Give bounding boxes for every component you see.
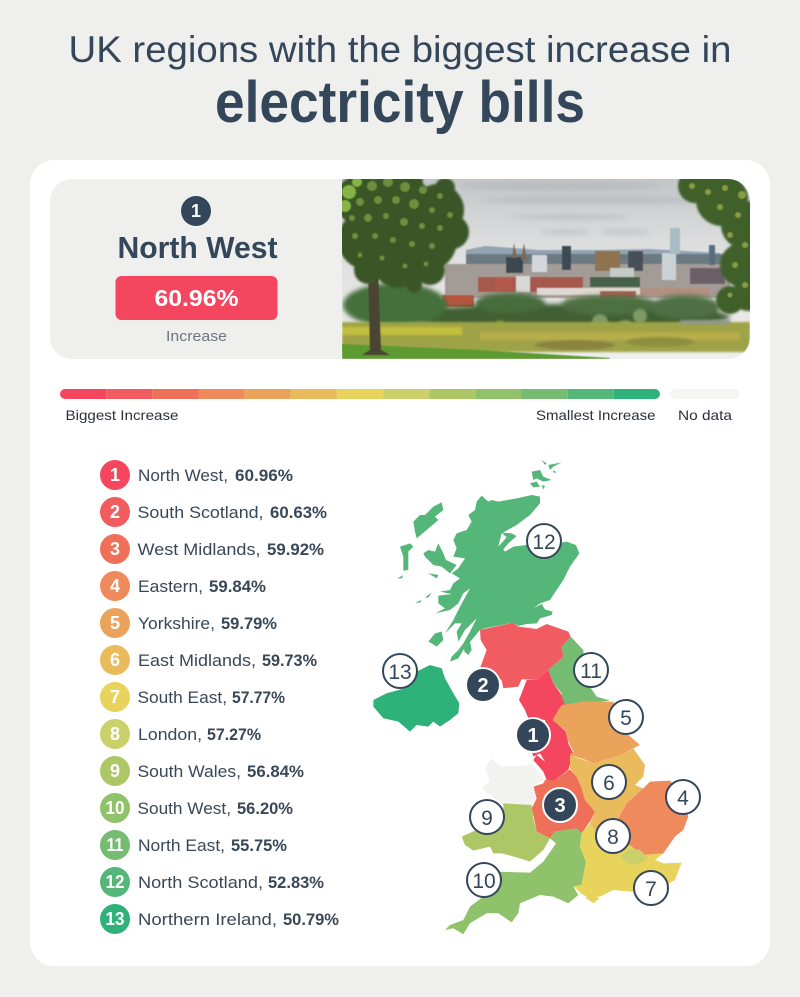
title: UK regions with the biggest increase in	[68, 29, 731, 70]
row 10: 56.20%	[237, 799, 293, 818]
rank badge	[181, 196, 211, 226]
row 5: Yorkshire,	[138, 614, 215, 633]
region: East Midlands	[570, 748, 645, 838]
region: London	[620, 848, 648, 865]
row 6: East Midlands,	[138, 651, 256, 670]
map marker 5: 5	[620, 707, 632, 730]
region: South Wales	[462, 803, 550, 862]
row 8	[100, 719, 261, 749]
row 1	[100, 460, 293, 490]
row 7: South East,	[138, 688, 227, 707]
row 5: 59.79%	[221, 614, 277, 633]
region: North West	[519, 670, 573, 780]
row 8: London,	[138, 725, 202, 744]
map marker 12	[527, 524, 561, 558]
row 2	[100, 497, 327, 527]
map marker 8	[596, 819, 630, 853]
map marker 9: 9	[481, 807, 493, 830]
panel: top region highlight	[50, 165, 769, 359]
map marker 6	[592, 765, 626, 799]
map marker 2	[466, 668, 500, 702]
row 9	[100, 756, 304, 786]
title: electricity bills	[215, 70, 585, 135]
row 9: 9	[110, 761, 120, 781]
map marker 7	[634, 871, 668, 905]
row 1: 60.96%	[235, 466, 293, 485]
UK map	[373, 460, 700, 934]
row 6: 6	[110, 650, 120, 670]
region: North East	[548, 637, 610, 707]
ranked list	[100, 460, 339, 934]
row 12	[100, 867, 324, 897]
row 9: 56.84%	[247, 762, 304, 781]
row 4: Eastern,	[138, 577, 203, 596]
scale bar	[60, 389, 660, 399]
map marker 8: 8	[607, 826, 619, 849]
row 4	[100, 571, 266, 601]
row 8: 8	[110, 724, 120, 744]
row 9: South Wales,	[138, 762, 241, 781]
region: Northern Ireland	[373, 665, 459, 732]
row 11: 11	[106, 835, 124, 855]
row 5: 5	[110, 613, 120, 633]
region: South West	[445, 828, 586, 934]
map marker 13: 13	[388, 661, 412, 684]
row 11: 55.75%	[231, 836, 287, 855]
row 7: 7	[110, 687, 120, 707]
pill caption: Increase	[166, 328, 227, 345]
row 4: 4	[110, 576, 120, 596]
region: Wales (no data)	[482, 758, 545, 805]
row 2: 60.63%	[270, 503, 327, 522]
map marker 11	[574, 653, 608, 687]
colour scale legend	[60, 389, 740, 423]
map marker 7: 7	[645, 878, 657, 901]
percentage pill	[116, 276, 278, 320]
region: South Scotland	[480, 623, 571, 688]
map marker 4	[666, 780, 700, 814]
row 6	[100, 645, 317, 675]
map marker 5	[609, 700, 643, 734]
row 1: 1	[110, 465, 120, 485]
no data swatch	[670, 389, 740, 399]
row 10: 10	[106, 798, 124, 818]
map marker 11: 11	[580, 660, 602, 683]
row 7	[100, 682, 285, 712]
row 10: South West,	[138, 799, 231, 818]
region: South East	[574, 823, 682, 903]
region: North Scotland	[397, 460, 579, 662]
row 5	[100, 608, 277, 638]
region: Yorkshire	[553, 702, 640, 763]
region: Eastern	[618, 781, 688, 855]
percentage pill: 60.96%	[154, 285, 238, 311]
region name: North West	[118, 230, 278, 265]
map marker 9	[470, 800, 504, 834]
map marker 10	[467, 863, 501, 897]
map marker 13	[383, 654, 417, 688]
map marker 1: 1	[527, 725, 539, 747]
map marker 3: 3	[554, 795, 566, 817]
row 11	[100, 830, 287, 860]
map marker 10: 10	[472, 870, 496, 893]
row 13: Northern Ireland,	[138, 910, 277, 929]
row 3	[100, 534, 324, 564]
title	[68, 29, 731, 135]
row 4: 59.84%	[209, 577, 266, 596]
map marker 12: 12	[532, 531, 556, 554]
map marker 6: 6	[603, 772, 615, 795]
rank badge: 1	[191, 201, 201, 221]
row 10	[100, 793, 293, 823]
map marker 1	[516, 718, 550, 752]
map marker 4: 4	[677, 787, 689, 810]
row 11: North East,	[138, 836, 225, 855]
scale label: no data: No data	[678, 407, 732, 423]
row 3: West Midlands,	[138, 540, 260, 559]
row 12: North Scotland,	[138, 873, 263, 892]
map marker 2: 2	[477, 675, 489, 697]
map marker 3	[543, 788, 577, 822]
photo: city skyline with trees	[342, 179, 750, 359]
scale label: biggest: Biggest Increase	[66, 407, 179, 423]
row 12: 52.83%	[268, 873, 324, 892]
row 3: 59.92%	[267, 540, 324, 559]
row 3: 3	[110, 539, 120, 559]
row 12: 12	[106, 872, 124, 892]
row 6: 59.73%	[262, 651, 317, 670]
row 13	[100, 904, 339, 934]
row 13: 13	[106, 909, 124, 929]
row 8: 57.27%	[207, 725, 261, 744]
row 2: 2	[110, 502, 120, 522]
row 1: North West,	[138, 466, 228, 485]
row 13: 50.79%	[283, 910, 339, 929]
panel: main card	[30, 160, 770, 966]
region: West Midlands	[532, 769, 595, 838]
scale label: smallest: Smallest Increase	[536, 407, 656, 423]
row 7: 57.77%	[232, 688, 285, 707]
row 2: South Scotland,	[138, 503, 264, 522]
